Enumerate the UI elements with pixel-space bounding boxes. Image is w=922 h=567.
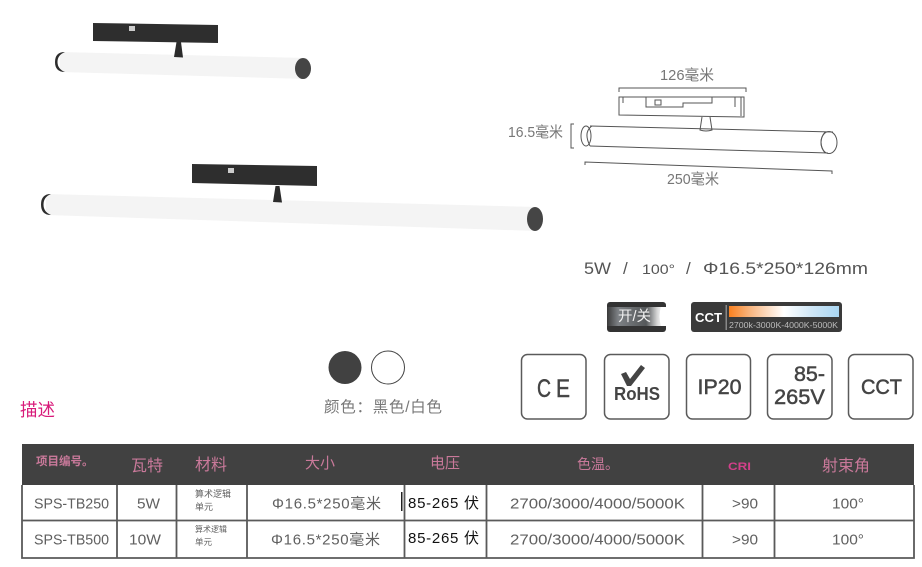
table header: 瓦特 xyxy=(131,457,163,475)
table row: SPS-TB500: 单元 xyxy=(195,537,213,547)
table row: SPS-TB250: 85-265 伏 xyxy=(408,495,479,512)
product photo: short track light xyxy=(55,23,311,79)
certification icon: CE: E xyxy=(556,375,570,403)
certification icon: CCT: CCT xyxy=(861,376,902,399)
table header: 色温。 xyxy=(577,456,619,472)
spec line: Φ16.5*250*126mm xyxy=(703,259,868,278)
table row: SPS-TB250: 5W xyxy=(137,496,161,512)
badge: CCT colour range xyxy=(691,302,842,332)
table row: SPS-TB250: 100° xyxy=(832,496,864,512)
table row: SPS-TB250: 单元 xyxy=(195,501,213,512)
badge: CCT colour range: 2700k-3000K-4000K-5000K xyxy=(729,321,839,330)
colour swatches xyxy=(324,351,442,416)
table header: CRI xyxy=(728,461,751,473)
table row: SPS-TB500: 算术逻辑 xyxy=(195,524,227,534)
spec line: 100° xyxy=(642,261,675,277)
certification icon: RoHS xyxy=(604,354,669,419)
table row: SPS-TB500: SPS-TB500 xyxy=(34,532,109,548)
dimension label: diameter 16.5: 16.5毫米 xyxy=(508,123,563,141)
table row: SPS-TB250: SPS-TB250 xyxy=(34,496,109,512)
certification icon: IP20 xyxy=(686,354,750,419)
table row: SPS-TB500: >90 xyxy=(732,532,758,548)
certification icon: voltage xyxy=(768,354,832,419)
table header xyxy=(22,444,914,485)
table row: SPS-TB250: >90 xyxy=(732,496,758,512)
certification icon: voltage: 265V xyxy=(774,386,825,409)
table header: 射束角 xyxy=(822,457,870,475)
badge: CCT colour range: CCT xyxy=(695,311,722,325)
specification table xyxy=(22,444,914,558)
colour label: 颜色：黑色/白色 xyxy=(324,398,442,416)
badge: on/off switch: 开/关 xyxy=(618,308,651,325)
dimension drawing xyxy=(508,66,837,188)
table row: SPS-TB250: 2700/3000/4000/5000K xyxy=(510,496,685,512)
table row: SPS-TB500: 10W xyxy=(129,532,162,548)
certification icon: RoHS: RoHS xyxy=(614,384,660,404)
spec line: 5W xyxy=(584,259,611,278)
table row: SPS-TB500: Φ16.5*250毫米 xyxy=(271,530,380,548)
certification icon: CE: C xyxy=(537,375,551,403)
table grid xyxy=(22,485,914,558)
table row: SPS-TB500 xyxy=(34,524,864,548)
dimension label: width 126: 126毫米 xyxy=(660,66,714,84)
certification icon: CE xyxy=(522,354,586,419)
table header: 大小 xyxy=(305,455,335,472)
table row: SPS-TB500: 85-265 伏 xyxy=(408,530,479,547)
table header: 电压 xyxy=(430,455,460,472)
certification icon: IP20: IP20 xyxy=(698,376,742,399)
certification icon: voltage: 85- xyxy=(794,363,825,386)
table row: SPS-TB250: Φ16.5*250毫米 xyxy=(272,494,381,512)
table row: SPS-TB500: 100° xyxy=(832,532,864,548)
table row: SPS-TB500: 2700/3000/4000/5000K xyxy=(510,532,685,548)
dimension label: length 250: 250毫米 xyxy=(667,170,719,188)
spec line: / xyxy=(686,259,691,278)
spec line: / xyxy=(623,259,628,278)
table header: 材料 xyxy=(195,456,227,474)
table header: 项目编号。 xyxy=(36,454,94,468)
spec line xyxy=(584,259,868,278)
section heading: description: 描述 xyxy=(20,400,55,420)
product photo: long track light xyxy=(41,164,543,231)
badge: on/off switch xyxy=(607,302,666,332)
table row: SPS-TB250 xyxy=(34,488,864,512)
certification icon: CCT xyxy=(848,354,913,419)
table row: SPS-TB250: 算术逻辑 xyxy=(195,488,231,499)
